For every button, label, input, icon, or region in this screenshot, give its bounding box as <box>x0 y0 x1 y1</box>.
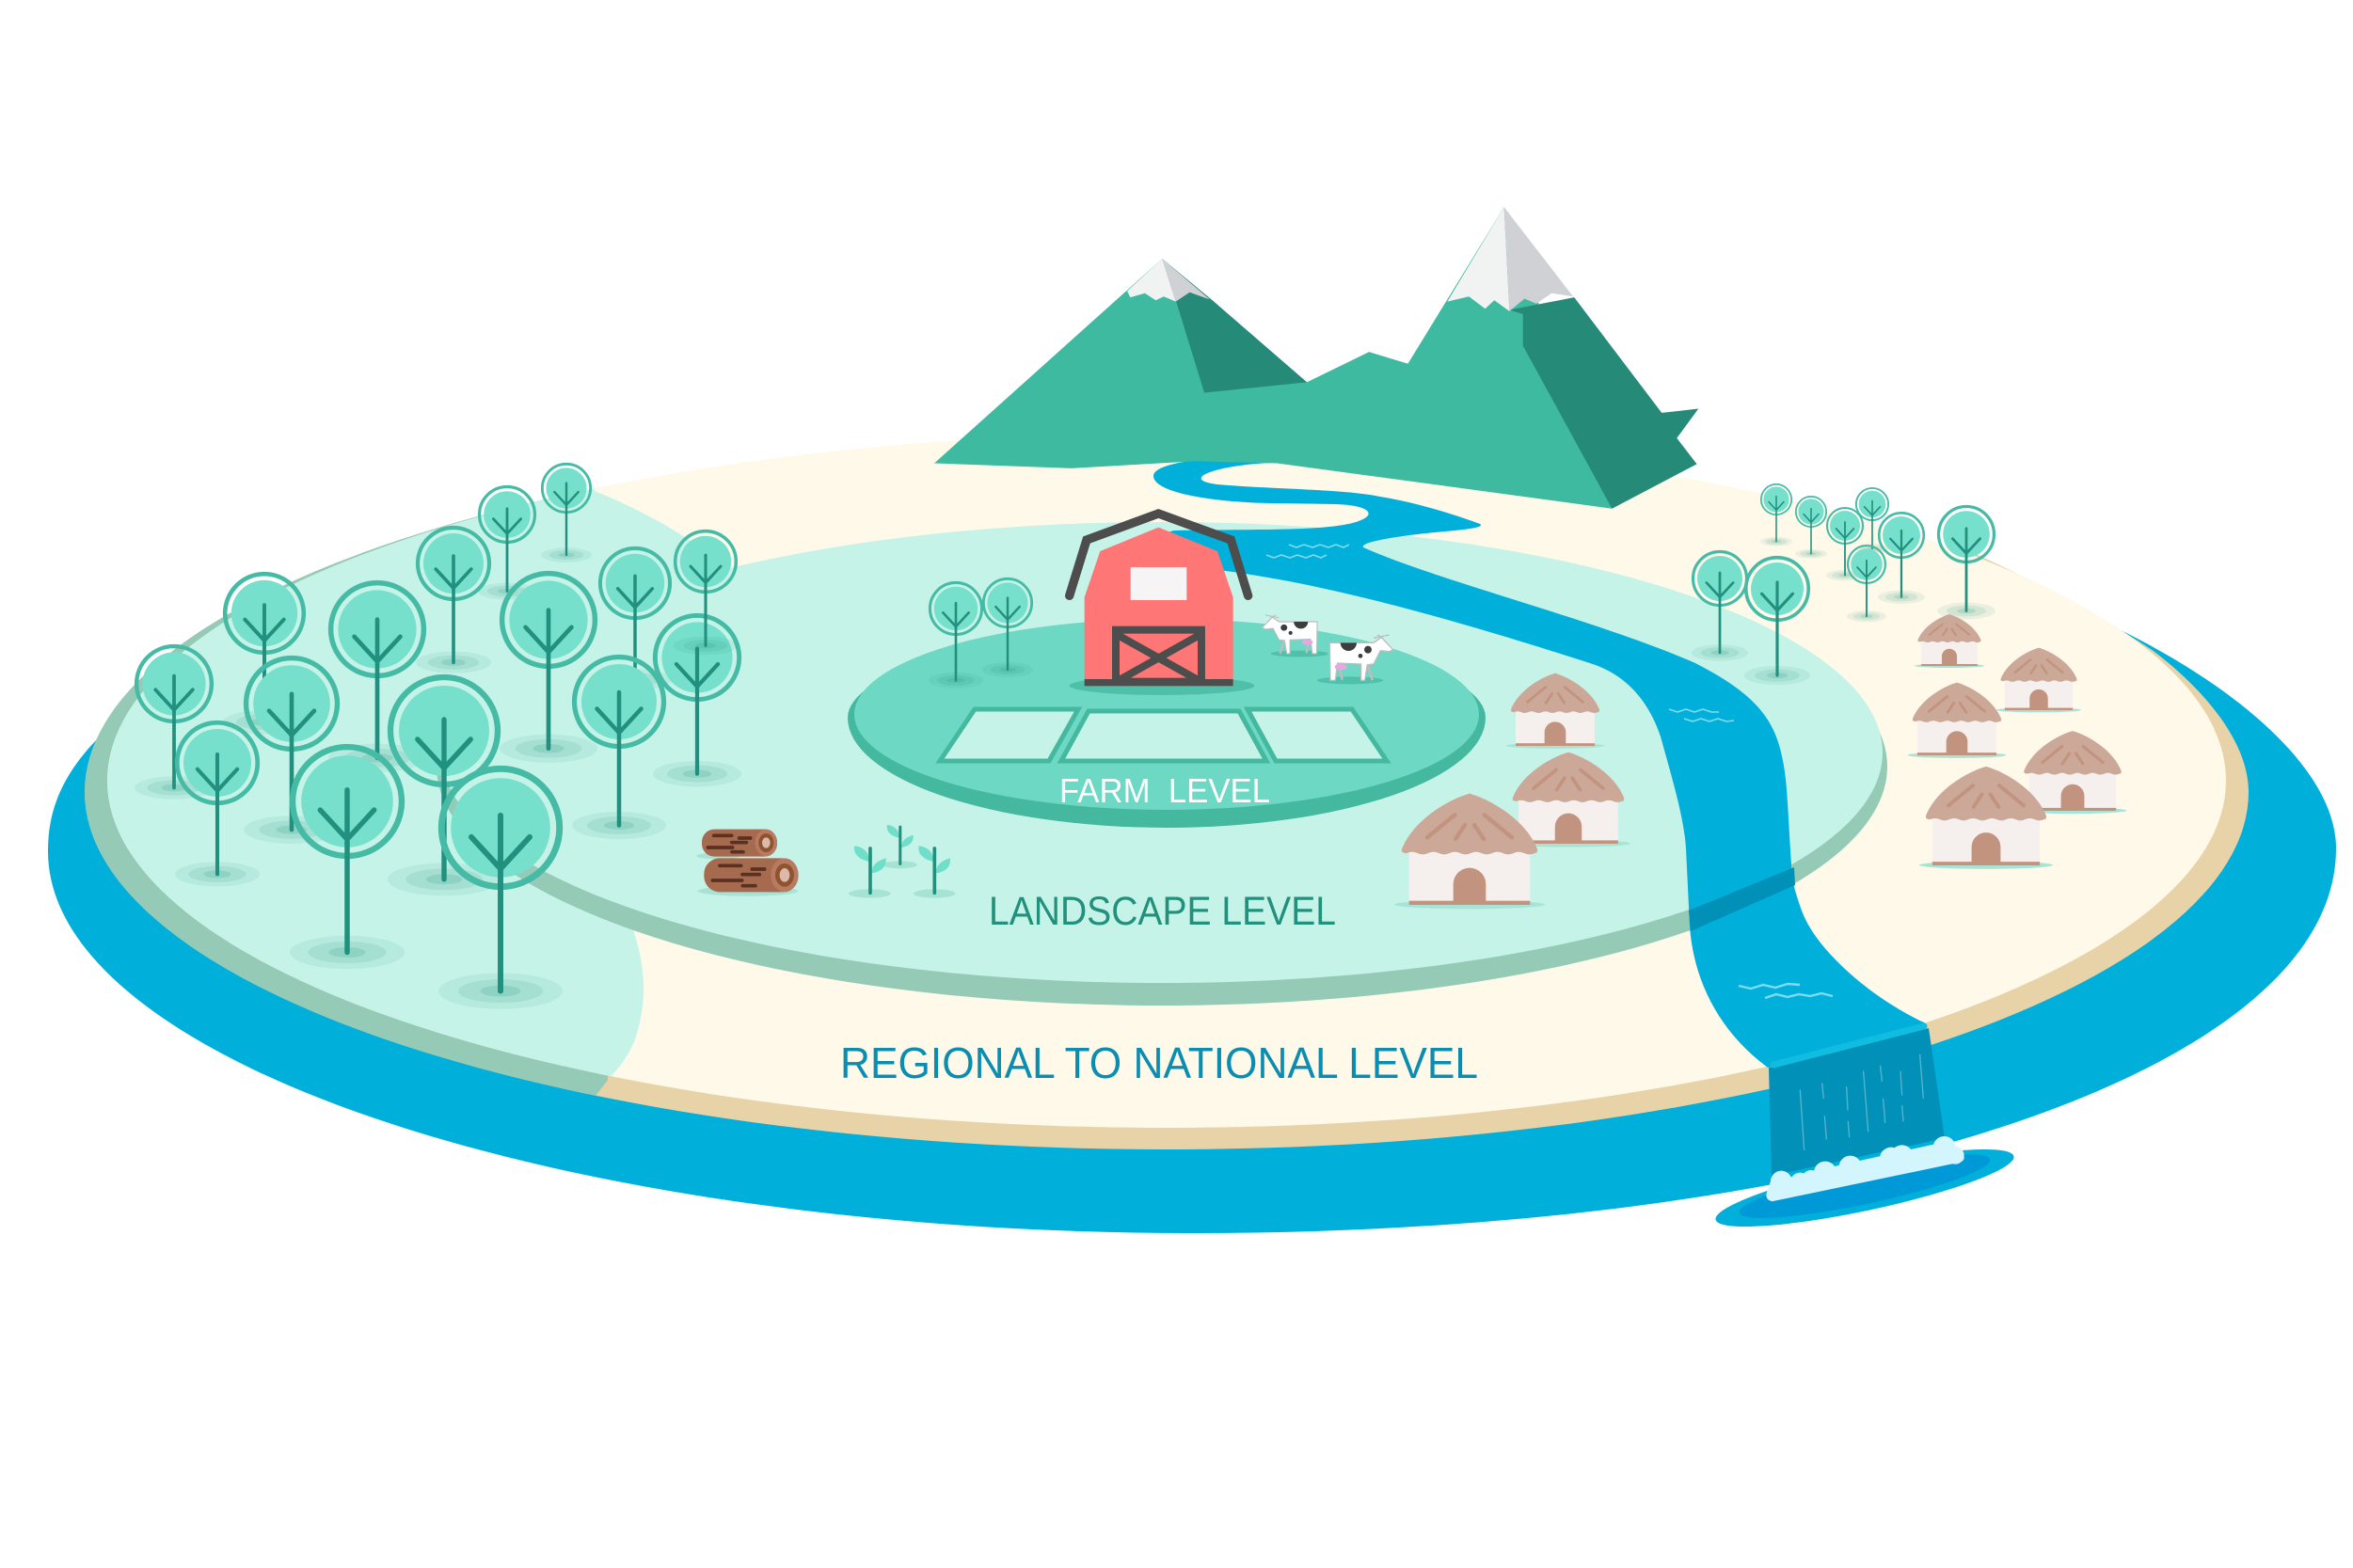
landscape village huts <box>1394 673 1630 909</box>
cows <box>1263 615 1393 684</box>
forest trees <box>135 464 741 1009</box>
waterfall <box>1766 1026 1964 1201</box>
sprouts <box>849 825 956 898</box>
pool below waterfall <box>1711 1134 2018 1242</box>
right side trees <box>1692 484 1995 685</box>
landscape level label: LANDSCAPE LEVEL <box>989 889 1336 934</box>
river crossing shadow <box>1689 867 1795 931</box>
regional village huts <box>1908 614 2126 869</box>
falling water lines <box>1800 1054 1923 1149</box>
snow caps <box>1127 207 1573 311</box>
landscape disc surface <box>441 522 1883 983</box>
barn <box>1070 514 1254 695</box>
logs <box>696 830 799 896</box>
forest zone <box>107 489 691 1076</box>
farm disc rim <box>848 633 1486 828</box>
farm disc surface <box>854 619 1479 810</box>
regional disc surface <box>107 434 2226 1128</box>
landscape disc rim <box>437 528 1887 1006</box>
infographic scene <box>48 207 2336 1233</box>
regional level label: REGIONAL TO NATIONAL LEVEL <box>840 1038 1478 1087</box>
farm trees <box>929 578 1033 689</box>
outer water ring <box>48 625 2336 1233</box>
logs and sprouts <box>696 825 956 898</box>
river <box>1153 455 1926 1068</box>
crop fields <box>940 709 1387 761</box>
foam <box>1766 1136 1964 1201</box>
farm level label: FARM LEVEL <box>1059 771 1270 810</box>
river ripples <box>1266 545 1833 998</box>
mountains <box>934 207 1698 509</box>
regional disc rim <box>85 435 2249 1149</box>
